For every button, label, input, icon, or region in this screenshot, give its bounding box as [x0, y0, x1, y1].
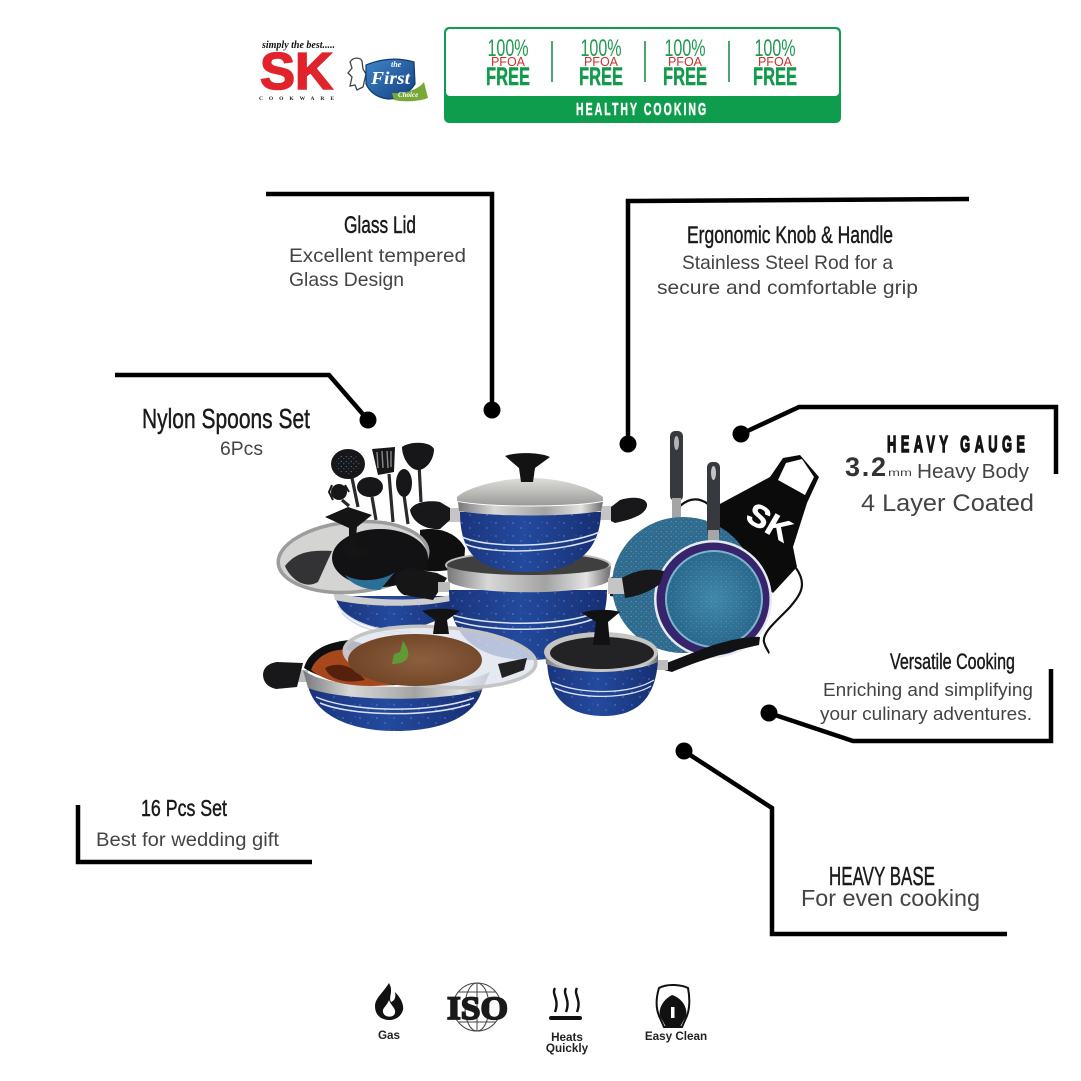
- icon: heats quickly: [546, 988, 589, 1055]
- icon: easy clean: [645, 985, 707, 1043]
- middle pot right handle: [608, 570, 664, 598]
- flat tawa pan: [612, 431, 754, 653]
- PFOA free healthy cooking banner: HEALTHY COOKING: [576, 100, 706, 120]
- callout: versatile cooking: Versatile Cooking: [890, 649, 1015, 674]
- callout: glass lid: Glass Lid: [344, 212, 416, 239]
- callout: heavy gauge: mm: [888, 468, 912, 479]
- callout: nylon spoons set: 6Pcs: [220, 438, 263, 460]
- The First Choice badge: Choice: [398, 91, 418, 99]
- callout: heavy gauge: [732, 407, 1056, 517]
- callout: heavy gauge: HEAVY GAUGE: [887, 432, 1025, 458]
- callout: heavy gauge: 3.2: [845, 452, 886, 482]
- The First Choice badge: First: [370, 68, 411, 88]
- PFOA free healthy cooking banner: FREE: [663, 64, 707, 91]
- callout: ergonomic knob and handle: Ergonomic Knob & Handle: [687, 222, 893, 249]
- callout: nylon spoons set: Nylon Spoons Set: [142, 403, 310, 434]
- The First Choice badge: the: [391, 60, 402, 69]
- PFOA free healthy cooking banner: FREE: [579, 64, 623, 91]
- PFOA free healthy cooking banner: [444, 27, 841, 123]
- SK Cookware logo: simply the best.....: [261, 40, 335, 51]
- callout: ergonomic knob and handle: secure and comfortable grip: [657, 277, 918, 299]
- callout: nylon spoons set: [115, 375, 376, 460]
- nylon utensils: [329, 443, 434, 524]
- callout: glass lid: Glass Design: [289, 269, 404, 291]
- middle pot back rim and handles: [446, 552, 663, 598]
- icon: gas flame: Gas: [378, 1029, 401, 1042]
- icon: heats quickly: Quickly: [546, 1042, 589, 1055]
- callout: heavy base: HEAVY BASE: [829, 861, 935, 891]
- PFOA free healthy cooking banner: FREE: [753, 64, 797, 91]
- icon: easy clean: Easy Clean: [645, 1030, 707, 1043]
- back kadai with open lid: [275, 507, 465, 634]
- callout: heavy gauge: 4 Layer Coated: [861, 490, 1034, 517]
- PFOA free healthy cooking banner: PFOA: [491, 55, 526, 69]
- callout: versatile cooking: your culinary adventures.: [820, 703, 1032, 724]
- frying pan: [654, 462, 772, 658]
- callout: versatile cooking: Enriching and simplifying: [823, 679, 1033, 700]
- The First Choice badge: [348, 58, 428, 101]
- icon: ISO: ISO: [447, 991, 508, 1027]
- SK Cookware logo: SK: [260, 43, 333, 101]
- callout: glass lid: Excellent tempered: [289, 245, 466, 267]
- middle pot front: [447, 566, 611, 660]
- callout: 16 pcs set: Best for wedding gift: [96, 830, 280, 851]
- callout: 16 pcs set: [78, 795, 312, 862]
- callout: ergonomic knob and handle: Stainless Steel Rod for a: [682, 252, 893, 274]
- icon: gas flame: [375, 983, 403, 1042]
- PFOA free healthy cooking banner: 100%: [664, 36, 706, 62]
- callout: heavy base: [676, 742, 1007, 934]
- apron with SK logo: [680, 455, 819, 653]
- PFOA free healthy cooking banner: 100%: [754, 36, 796, 62]
- icon: heats quickly: Heats: [551, 1031, 583, 1044]
- PFOA free healthy cooking banner: 100%: [487, 36, 529, 62]
- callout: 16 pcs set: 16 Pcs Set: [141, 795, 227, 821]
- icon: ISO: [447, 983, 508, 1031]
- apron with SK logo: SK: [740, 496, 798, 549]
- PFOA free healthy cooking banner: PFOA: [758, 55, 793, 69]
- callout: glass lid: [266, 194, 500, 418]
- PFOA free healthy cooking banner: PFOA: [668, 55, 703, 69]
- callout: ergonomic knob and handle: [620, 199, 969, 452]
- PFOA free healthy cooking banner: FREE: [486, 64, 530, 91]
- small saucepan with lid: [544, 610, 760, 716]
- wok with food and glass lid: [263, 609, 538, 731]
- SK Cookware logo: COOKWARE: [259, 96, 334, 102]
- top pot with glass lid: [410, 453, 647, 572]
- callout: versatile cooking: [760, 649, 1051, 741]
- cookware set product illustration: [263, 431, 819, 731]
- PFOA free healthy cooking banner: 100%: [580, 36, 622, 62]
- PFOA free healthy cooking banner: PFOA: [584, 55, 619, 69]
- callout: heavy base: For even cooking: [801, 885, 980, 911]
- callout: heavy gauge: Heavy Body: [917, 461, 1029, 483]
